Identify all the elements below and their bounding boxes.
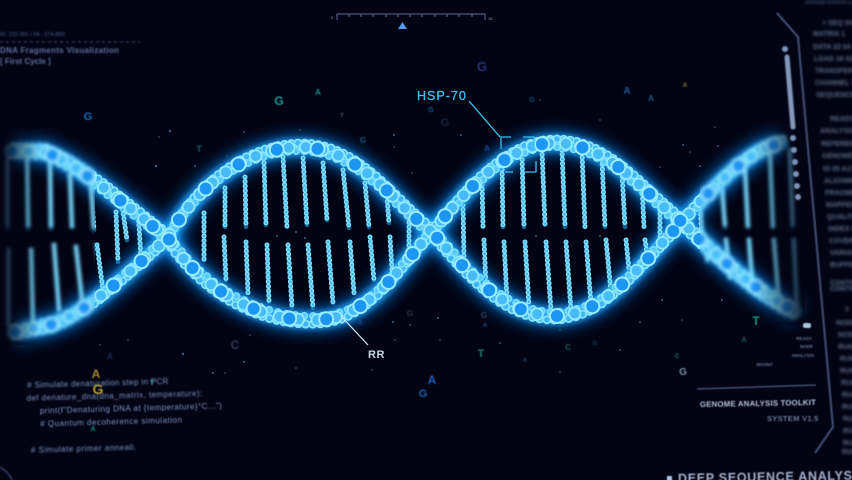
floating nucleotide letters: G — [274, 94, 284, 108]
panel: genome analysis toolkit title — [697, 385, 819, 423]
panel: code snippet — [26, 375, 224, 455]
callout: RR — [341, 316, 385, 361]
floating nucleotide letters: A — [315, 88, 321, 97]
DNA double helix — [0, 120, 805, 345]
floating nucleotide letters: G — [481, 311, 487, 320]
corner arc — [0, 467, 12, 480]
helix blurred right end — [700, 132, 806, 321]
floating nucleotide letters: G — [419, 388, 427, 400]
callout: HSP-70: HSP-70 — [417, 89, 467, 103]
floating nucleotide letters: T — [752, 314, 760, 328]
panel: right data column: > SEQ 04 — [822, 20, 852, 27]
panel: right data column — [805, 0, 852, 456]
floating nucleotide letters: A — [484, 144, 490, 153]
panel: top-left caption — [0, 32, 140, 66]
top scale ruler — [331, 14, 493, 29]
panel: top-left caption: DNA Fragments Visualization — [0, 46, 119, 55]
right frame — [777, 13, 833, 453]
status readout: ANALYSIS — [792, 353, 814, 358]
floating nucleotide letters: G — [407, 309, 413, 318]
floating nucleotide letters: C — [675, 354, 680, 360]
floating nucleotide letters: G — [360, 136, 366, 145]
panel: code snippet: print(f"Denaturing DNA at {temperature}°C...") — [40, 401, 222, 416]
panel: code snippet: # Simulate denaturation step in PCR — [27, 377, 169, 390]
helix outer glow — [12, 143, 797, 332]
floating nucleotide letters: T — [196, 144, 202, 154]
top scale ruler: 15 — [488, 16, 493, 21]
status readout: NODE — [800, 344, 813, 349]
floating nucleotide letters: A — [623, 86, 631, 97]
floating nucleotide letters: G — [428, 107, 434, 114]
panel: top-left caption: ID: 102-001 / 04 - 274-889 — [0, 32, 65, 38]
panel: right data column: 1 — [845, 306, 849, 313]
floating nucleotide letters: A — [107, 352, 113, 361]
floating nucleotide letters: G — [441, 117, 449, 129]
floating nucleotide letters: G — [529, 97, 535, 104]
floating nucleotide letters: T — [340, 113, 344, 119]
floating nucleotide letters: A — [428, 373, 437, 387]
floating nucleotide letters — [84, 59, 760, 433]
panel: genome analysis toolkit title: SYSTEM V1.5 — [767, 414, 819, 423]
status readout: READY — [796, 336, 812, 341]
panel: genome analysis toolkit title: GENOME ANALYSIS TOOLKIT — [700, 398, 816, 409]
floating nucleotide letters: G — [679, 367, 687, 378]
helix blurred left end — [4, 141, 95, 342]
floating nucleotide letters: A — [648, 94, 654, 103]
floating nucleotide letters: A — [683, 83, 688, 89]
floating nucleotide letters: G — [477, 59, 487, 74]
floating nucleotide letters: T — [150, 380, 155, 387]
helix sharp centre — [95, 134, 700, 328]
scroll indicator — [782, 46, 801, 200]
floating nucleotide letters: A — [357, 320, 363, 327]
floating nucleotide letters: G — [93, 381, 104, 397]
floating nucleotide letters: G — [84, 111, 92, 123]
panel: code snippet: # Quantum decoherence simulation — [40, 416, 183, 429]
floating nucleotide letters: A — [741, 337, 747, 344]
floating nucleotide letters: C — [565, 343, 571, 352]
floating nucleotide letters: A — [90, 426, 96, 433]
floating nucleotide letters: A — [523, 358, 528, 364]
panel: code snippet: # Simulate primer anneali. — [31, 443, 137, 455]
floating nucleotide letters: A — [92, 367, 101, 381]
top scale ruler: 5 — [331, 15, 334, 20]
panel: right data column: DATA 22 04 — [813, 44, 851, 51]
floating nucleotide letters: T — [478, 348, 485, 360]
panel: code snippet: def denature_dna(dna_matrix, temperature): — [26, 389, 203, 403]
floating nucleotide letters: G — [593, 341, 598, 347]
callout: HSP-70 — [417, 89, 536, 172]
panel: top-left caption: [ First Cycle ] — [0, 57, 51, 66]
star particles — [99, 99, 723, 374]
status readout — [756, 323, 814, 367]
floating nucleotide letters: A — [483, 323, 488, 329]
panel: right data column: TRANSFER — [815, 68, 852, 75]
floating nucleotide letters: C — [231, 338, 240, 352]
panel: right data column: MATRIX 1 — [813, 31, 845, 38]
callout: RR: RR — [368, 349, 385, 361]
status readout: MOUNT — [756, 362, 773, 367]
